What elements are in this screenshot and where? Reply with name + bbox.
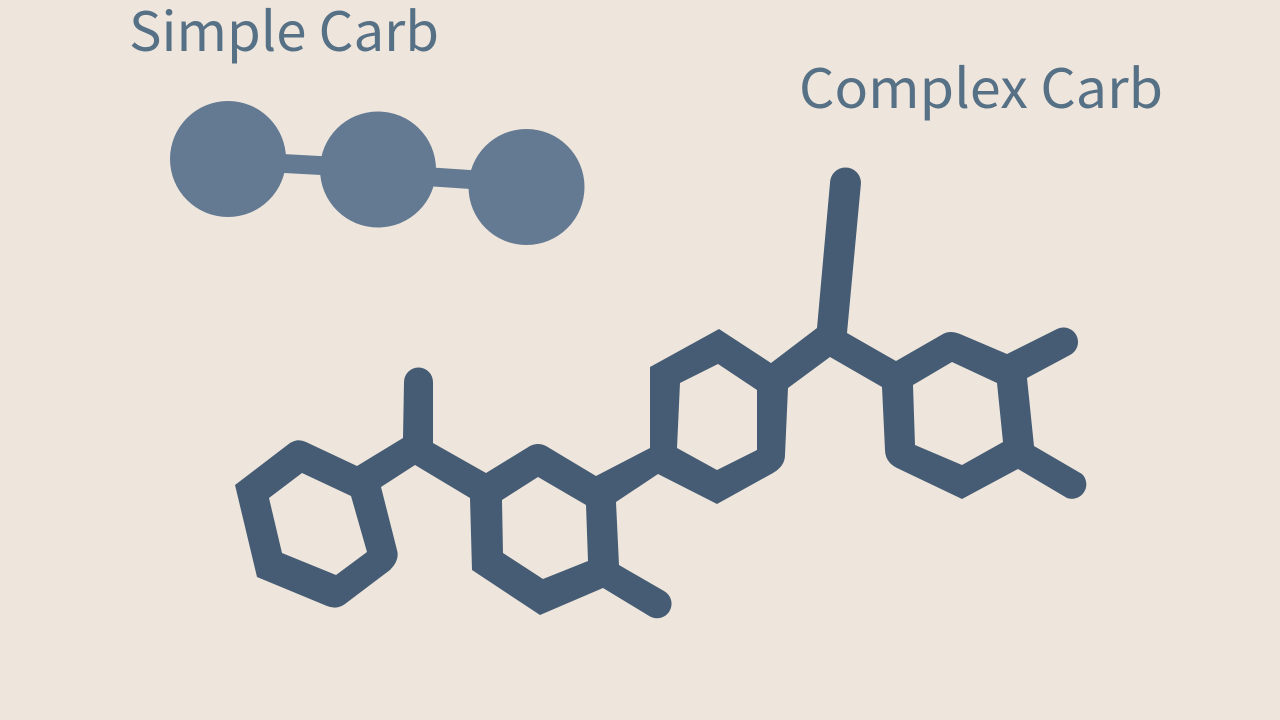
diagram: complex carb molecule [235,167,1086,618]
title: Complex Carb: Complex Carb [799,45,1163,124]
diagram: simple carb molecule [170,101,584,245]
